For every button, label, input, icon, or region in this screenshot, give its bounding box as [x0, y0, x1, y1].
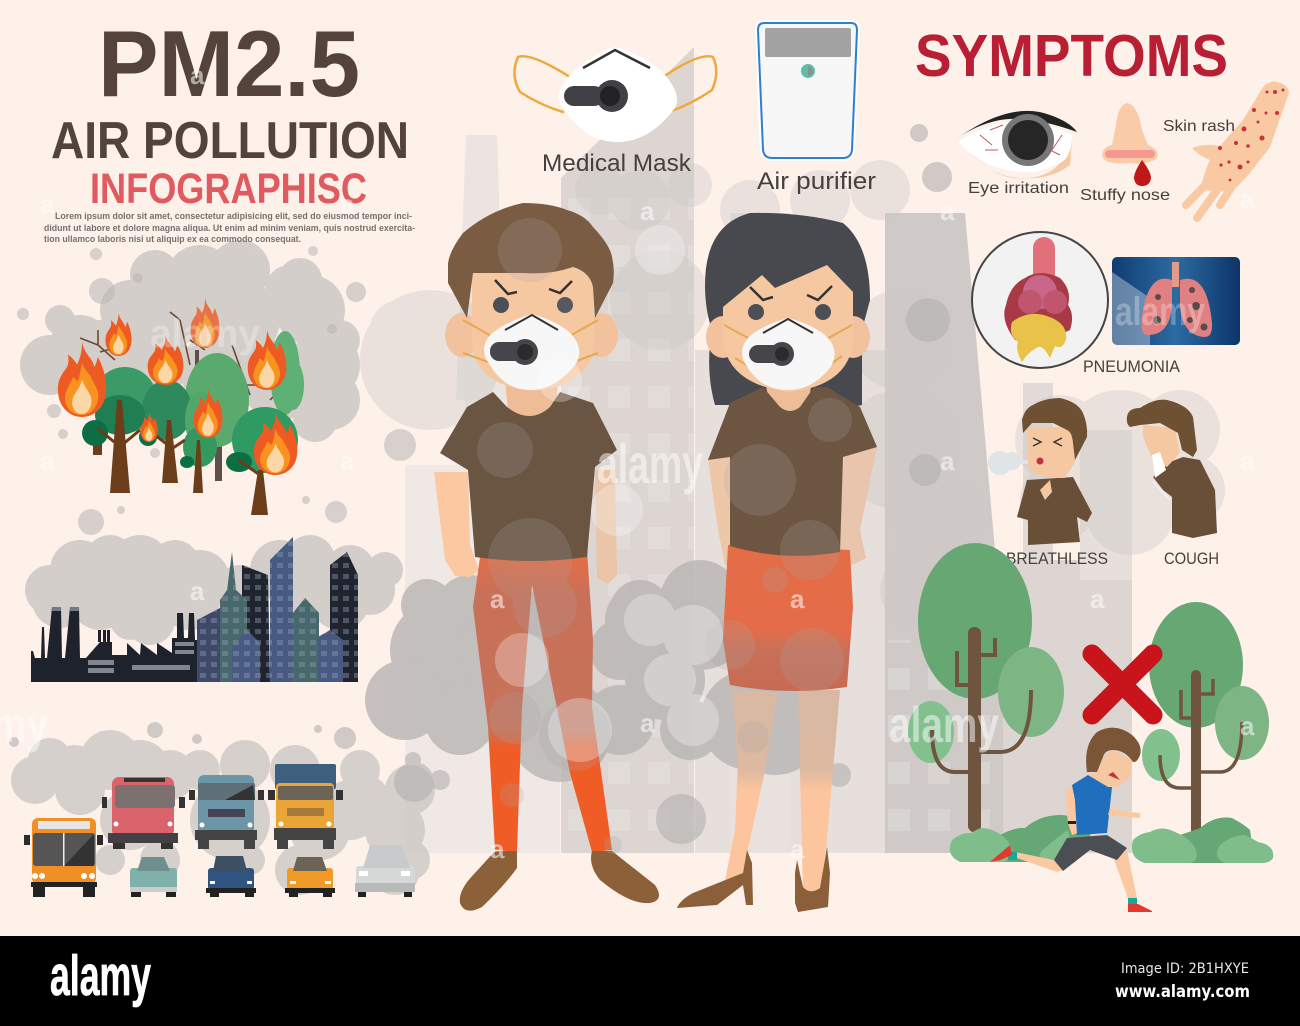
man shoes — [460, 851, 659, 911]
watermark: small letters: a — [490, 584, 505, 614]
runner front leg — [1113, 850, 1137, 898]
illustration: factories and city — [31, 537, 358, 682]
icon: lung x-ray — [1112, 257, 1240, 345]
runner front arm — [1108, 808, 1140, 818]
watermark: small letters — [40, 60, 1255, 864]
icon: air purifier — [758, 23, 857, 158]
icon: irritated eye — [955, 111, 1077, 178]
brown trunks — [110, 400, 268, 515]
white car — [355, 845, 415, 897]
icon: arm with rash — [1186, 82, 1289, 218]
skyline towers — [197, 537, 358, 682]
watermark: small letters: a — [790, 584, 805, 614]
watermark: alamy repeated: alamy — [889, 697, 999, 753]
man hair — [448, 203, 614, 318]
runner hair — [1086, 728, 1141, 772]
smoke particles: forest — [17, 246, 416, 535]
runner back leg — [1015, 852, 1068, 872]
watermark: faint alamy: alamy — [1115, 290, 1206, 334]
person: woman with mask — [677, 213, 877, 912]
footer bar — [0, 936, 1300, 1026]
watermark: faint alamy — [150, 290, 1206, 356]
illustration: bushes — [950, 815, 1273, 863]
central smoke — [365, 560, 825, 782]
intro text block: tion ullamco laboris nisi ut aliquip ex ea commodo consequat. — [44, 234, 301, 245]
woman shirt — [708, 387, 877, 556]
title: AIR POLLUTION: AIR POLLUTION — [51, 112, 409, 170]
label: air purifier: Air purifier — [757, 168, 876, 195]
woman legs — [690, 690, 778, 900]
light fog highlights — [495, 225, 723, 762]
tree crowns — [82, 331, 304, 473]
illustration: burning forest — [58, 298, 304, 515]
red truck — [102, 777, 185, 849]
woman arms — [708, 447, 877, 566]
drifting particles — [9, 124, 952, 844]
watermark: faint alamy: alamy — [150, 312, 261, 356]
watermark: small letters: a — [940, 196, 955, 226]
watermark: small letters: a — [340, 189, 355, 219]
illustration: traffic vehicles — [24, 764, 415, 897]
man legs and trousers — [473, 550, 612, 852]
icon: nose with blood drop — [1102, 103, 1158, 186]
runner face — [1088, 750, 1132, 787]
blue car — [206, 856, 256, 897]
man neck — [505, 380, 558, 422]
footer url: www.alamy.com — [1115, 982, 1250, 1002]
man face — [472, 265, 594, 391]
orange truck — [268, 764, 343, 849]
intro text block: Lorem ipsum dolor sit amet, consectetur adipisicing elit, sed do eiusmod tempor inci- — [55, 211, 412, 222]
man shirt — [440, 392, 617, 561]
icon: red prohibition cross — [1092, 654, 1153, 715]
watermark: small letters: a — [490, 834, 505, 864]
watermark: small letters: a — [40, 446, 55, 476]
watermark: small letters: a — [640, 708, 655, 738]
icon: coughing person — [1127, 400, 1217, 538]
woman shoes — [677, 847, 830, 912]
woman skirt — [723, 545, 853, 691]
watermark: small letters: a — [940, 446, 955, 476]
watermark: small letters: a — [190, 60, 205, 90]
watermark: small letters: a — [790, 834, 805, 864]
woman face — [723, 265, 853, 392]
subtitle: INFOGRAPHISC: INFOGRAPHISC — [90, 165, 367, 213]
woman eyes and brows — [748, 286, 832, 320]
watermark: small letters: a — [340, 446, 355, 476]
dead branches — [80, 312, 295, 400]
polluted city backdrop — [405, 47, 1132, 853]
icon: pneumonia alveoli — [972, 232, 1108, 368]
watermark: small letters: a — [40, 189, 55, 219]
teal car — [130, 857, 177, 897]
man ears — [445, 313, 618, 357]
man eyes and brows — [493, 280, 573, 313]
watermark: small letters: a — [1240, 446, 1255, 476]
label: skin rash: Skin rash — [1163, 118, 1235, 135]
watermark: alamy repeated — [0, 432, 999, 753]
label: medical mask: Medical Mask — [542, 150, 692, 177]
watermark: small letters: a — [640, 196, 655, 226]
footer image id: Image ID: 2B1HXYE — [1121, 961, 1249, 977]
watermark: alamy repeated: alamy — [597, 432, 703, 495]
foreground fog over people — [477, 218, 852, 854]
flames — [58, 298, 297, 475]
icon: medical mask — [514, 47, 716, 142]
smoke cloud: traffic — [11, 730, 435, 895]
gray trunks — [93, 350, 286, 481]
intro text block — [44, 211, 415, 245]
bus — [24, 818, 103, 897]
runner back arm — [1065, 786, 1080, 835]
runner shorts — [1054, 835, 1127, 871]
watermark: small letters: a — [1090, 584, 1105, 614]
woman mask — [724, 318, 852, 390]
smoke cloud: forest — [20, 240, 360, 442]
label: eye irritation: Eye irritation — [968, 180, 1069, 197]
man arms — [434, 470, 617, 584]
blue truck — [189, 775, 264, 849]
factory windows — [52, 607, 194, 673]
upper and right smoke — [360, 160, 1225, 630]
watermark: small letters: a — [190, 576, 205, 606]
man mask — [463, 314, 598, 390]
smoke cloud: city — [25, 535, 403, 645]
yellow car — [285, 857, 335, 897]
watermark: small letters: a — [1240, 184, 1255, 214]
illustration: running man — [990, 728, 1152, 912]
person: man with mask — [434, 203, 659, 911]
label: stuffy nose: Stuffy nose — [1080, 187, 1170, 204]
factory silhouette — [31, 607, 197, 682]
woman neck — [765, 380, 812, 416]
icon: breathless person — [988, 398, 1092, 545]
label: cough: COUGH — [1164, 549, 1219, 568]
woman hair — [705, 213, 870, 408]
runner shirt — [1072, 775, 1112, 835]
illustration: right tree — [1142, 602, 1269, 835]
watermark: small letters: a — [1240, 711, 1255, 741]
woman ears — [706, 316, 870, 358]
label: pneumonia: PNEUMONIA — [1083, 357, 1181, 376]
label: breathless: BREATHLESS — [1006, 549, 1108, 568]
heading: SYMPTOMS: SYMPTOMS — [915, 23, 1228, 89]
title: PM2.5: PM2.5 — [98, 11, 360, 116]
intro text block: didunt ut labore et dolore magna aliqua. Ut enim ad minim veniam, quis nostrud exercita- — [44, 223, 415, 234]
illustration: left tree — [908, 543, 1064, 832]
footer logo: alamy: alamy — [50, 944, 151, 1008]
